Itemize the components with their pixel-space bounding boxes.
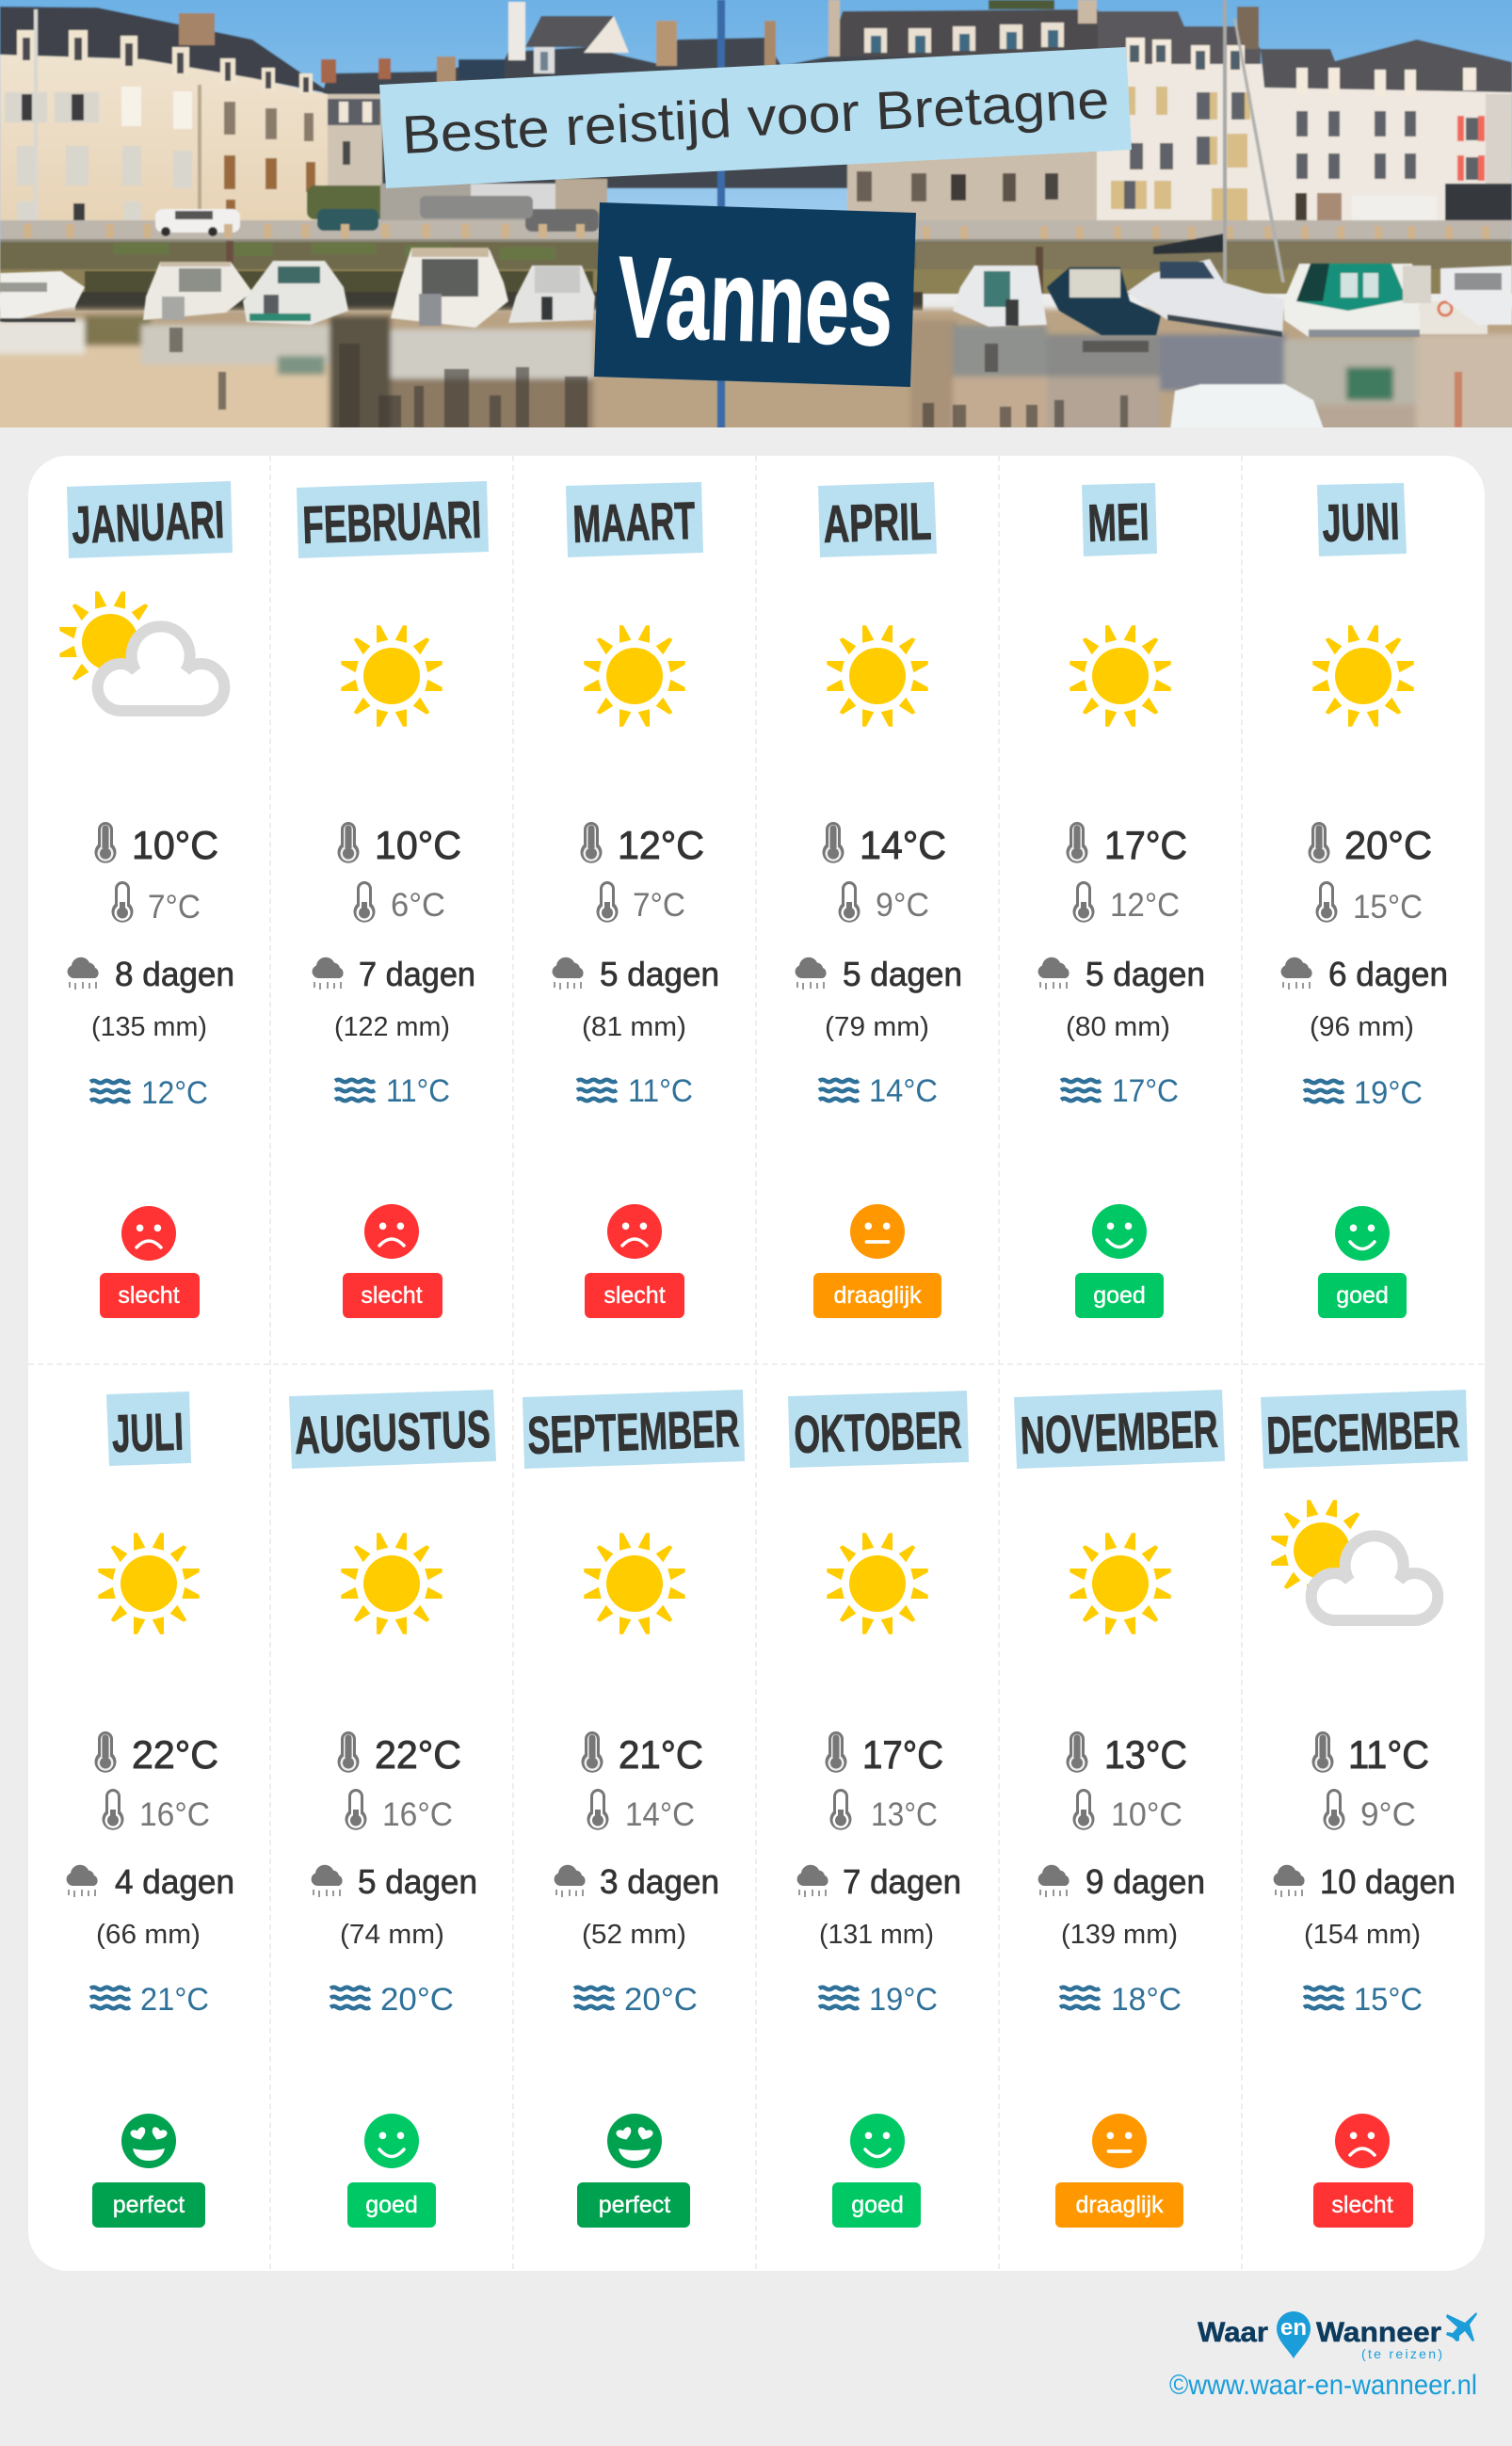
rainfall: (52 mm) xyxy=(582,1920,686,1950)
icon: map pin xyxy=(1277,2311,1311,2358)
rating draaglijk xyxy=(1055,2114,1183,2228)
rating goed: goed xyxy=(1336,1282,1389,1309)
min temperature xyxy=(345,1789,453,1833)
city name: Vannes xyxy=(616,233,894,370)
month label augustus xyxy=(289,1390,496,1469)
rain days: 8 dagen xyxy=(115,955,234,993)
sea temperature: 21°C xyxy=(140,1982,209,2018)
panel: november xyxy=(1014,1390,1225,2228)
rating goed: goed xyxy=(1093,1282,1146,1309)
max temperature xyxy=(1312,1731,1429,1777)
rainfall: (81 mm) xyxy=(582,1012,686,1042)
rainfall: (66 mm) xyxy=(96,1920,201,1950)
rainfall: (122 mm) xyxy=(334,1012,450,1042)
rain days: 6 dagen xyxy=(1328,955,1448,993)
title band xyxy=(379,47,1132,188)
max temperature: 10°C xyxy=(375,823,461,867)
rating slecht: slecht xyxy=(1331,2192,1393,2218)
rainfall: (139 mm) xyxy=(1061,1920,1178,1950)
min temperature: 16°C xyxy=(139,1796,210,1833)
max temperature: 17°C xyxy=(1104,823,1187,867)
icon: sun xyxy=(1070,1533,1171,1634)
logo: Waar en Wanneer: Waar xyxy=(1198,2317,1268,2348)
logo: Waar en Wanneer: (te reizen) xyxy=(1361,2346,1442,2361)
rating slecht xyxy=(585,1204,684,1318)
sea temperature xyxy=(1060,1982,1182,2018)
min temperature xyxy=(838,881,929,924)
rain days: 10 dagen xyxy=(1320,1862,1456,1901)
sea temperature xyxy=(330,1982,454,2018)
panel: september xyxy=(523,1390,745,2228)
rain days: 5 dagen xyxy=(358,1862,477,1901)
sea temperature: 12°C xyxy=(141,1075,208,1111)
month label november xyxy=(1014,1390,1225,1469)
rating slecht xyxy=(343,1204,442,1318)
sea temperature xyxy=(335,1073,450,1109)
min temperature xyxy=(1073,881,1180,924)
icon: sun xyxy=(341,1533,442,1634)
min temperature: 6°C xyxy=(391,887,445,924)
rating slecht: slecht xyxy=(361,1282,423,1309)
rain days: 4 dagen xyxy=(115,1862,234,1901)
month label maart xyxy=(566,482,703,557)
month label augustus: AUGUSTUS xyxy=(294,1399,491,1465)
rainfall: (74 mm) xyxy=(340,1920,444,1950)
month label juni: JUNI xyxy=(1321,491,1400,553)
min temperature: 14°C xyxy=(625,1796,695,1833)
logo: Waar en Wanneer xyxy=(1198,2311,1477,2361)
icon: sun behind cloud xyxy=(1271,1500,1438,1620)
sea temperature xyxy=(1061,1073,1179,1109)
rain days: 5 dagen xyxy=(843,955,962,993)
rating slecht: slecht xyxy=(603,1282,666,1309)
sea temperature: 14°C xyxy=(869,1073,938,1109)
sea temperature xyxy=(574,1982,698,2018)
rainfall: (80 mm) xyxy=(1066,1012,1170,1042)
min temperature: 16°C xyxy=(382,1796,453,1833)
rating perfect: perfect xyxy=(113,2192,185,2218)
rainfall: (135 mm) xyxy=(91,1012,207,1042)
rain days: 7 dagen xyxy=(843,1862,961,1901)
rain days xyxy=(313,955,475,993)
rating perfect xyxy=(92,2114,205,2228)
min temperature: 13°C xyxy=(871,1796,938,1833)
panel: mei xyxy=(1038,483,1205,1318)
min temperature: 10°C xyxy=(1111,1796,1182,1833)
rain days xyxy=(67,1862,234,1901)
sea temperature: 20°C xyxy=(624,1982,698,2018)
month label juni xyxy=(1317,483,1407,556)
max temperature: 13°C xyxy=(1104,1732,1187,1777)
rating draaglijk xyxy=(813,1204,941,1318)
rating slecht xyxy=(1313,2114,1413,2228)
max temperature xyxy=(825,1731,943,1777)
month label april: APRIL xyxy=(822,491,932,554)
sea temperature xyxy=(1304,1075,1423,1111)
rating goed xyxy=(832,2114,921,2228)
month label maart: MAART xyxy=(571,491,696,554)
sea temperature xyxy=(577,1073,693,1109)
min temperature xyxy=(1073,1789,1182,1833)
month label oktober xyxy=(788,1391,969,1468)
max temperature: 11°C xyxy=(1348,1732,1429,1777)
max temperature xyxy=(582,1731,703,1777)
rating slecht xyxy=(100,1206,200,1318)
icon: sun behind cloud xyxy=(59,591,224,711)
panel: december xyxy=(1261,1390,1468,2228)
rating goed xyxy=(1075,1204,1164,1318)
rating perfect xyxy=(577,2114,690,2228)
max temperature: 22°C xyxy=(132,1732,218,1777)
max temperature: 20°C xyxy=(1344,823,1432,867)
min temperature: 9°C xyxy=(1360,1796,1416,1833)
max temperature: 14°C xyxy=(860,823,946,867)
panel: oktober xyxy=(788,1391,969,2228)
min temperature xyxy=(1324,1789,1416,1833)
max temperature xyxy=(94,822,218,867)
rating perfect: perfect xyxy=(599,2192,670,2218)
rain days: 5 dagen xyxy=(1086,955,1205,993)
icon: sun xyxy=(98,1533,200,1634)
rating draaglijk: draaglijk xyxy=(833,1282,922,1309)
min temperature xyxy=(354,881,445,924)
min temperature: 12°C xyxy=(1110,887,1180,924)
sea temperature: 19°C xyxy=(869,1982,938,2018)
month label april xyxy=(818,482,937,557)
sea temperature xyxy=(90,1982,209,2018)
max temperature: 21°C xyxy=(619,1732,703,1777)
month label februari: FEBRUARI xyxy=(301,490,482,555)
panel: februari xyxy=(297,481,489,1318)
sea temperature: 20°C xyxy=(380,1982,454,2018)
month label september: SEPTEMBER xyxy=(526,1398,740,1465)
icon: sun xyxy=(827,625,928,727)
rain days: 3 dagen xyxy=(600,1862,719,1901)
header photo: harbour of Vannes xyxy=(0,0,1512,437)
sea temperature xyxy=(819,1073,938,1109)
icon: sun xyxy=(584,625,685,727)
rating goed xyxy=(347,2114,436,2228)
max temperature: 17°C xyxy=(862,1732,943,1777)
rainfall: (131 mm) xyxy=(819,1920,934,1950)
panel: calendar card xyxy=(28,456,1485,2271)
max temperature xyxy=(1066,822,1187,867)
sea temperature: 11°C xyxy=(386,1073,450,1109)
month label september xyxy=(523,1390,745,1469)
rainfall: (96 mm) xyxy=(1310,1012,1414,1042)
max temperature xyxy=(1309,822,1432,867)
panel: juli xyxy=(67,1392,234,2228)
icon: sun xyxy=(827,1533,928,1634)
max temperature xyxy=(94,1731,218,1777)
panel: maart xyxy=(553,482,719,1318)
sea temperature xyxy=(90,1075,208,1111)
sea temperature: 19°C xyxy=(1354,1075,1423,1111)
max temperature: 12°C xyxy=(618,823,704,867)
min temperature xyxy=(111,881,201,925)
website url: ©www.waar-en-wanneer.nl xyxy=(1169,2370,1477,2401)
rainfall: (154 mm) xyxy=(1304,1920,1421,1950)
icon: sun xyxy=(1070,625,1171,727)
month label januari: JANUARI xyxy=(71,490,225,555)
rating slecht: slecht xyxy=(118,1282,180,1309)
rating goed xyxy=(1318,1206,1407,1318)
min temperature xyxy=(102,1789,210,1833)
icon: sun xyxy=(1312,625,1414,727)
max temperature xyxy=(1066,1731,1187,1777)
city name block xyxy=(594,202,916,387)
rainfall: (79 mm) xyxy=(825,1012,929,1042)
min temperature: 15°C xyxy=(1353,889,1423,925)
max temperature xyxy=(337,822,461,867)
icon: sun xyxy=(584,1533,685,1634)
panel: april xyxy=(796,482,962,1318)
panel: juni xyxy=(1281,483,1448,1318)
min temperature xyxy=(830,1789,938,1833)
min temperature xyxy=(597,881,685,924)
sea temperature xyxy=(819,1982,938,2018)
sea temperature: 11°C xyxy=(628,1073,693,1109)
min temperature xyxy=(587,1789,695,1833)
month label oktober: OKTOBER xyxy=(793,1400,962,1464)
sea temperature: 18°C xyxy=(1111,1982,1182,2018)
icon: sun xyxy=(341,625,442,727)
month label mei xyxy=(1082,483,1157,556)
month label juli xyxy=(106,1392,191,1466)
sea temperature xyxy=(1304,1982,1423,2018)
icon: map pin: en xyxy=(1280,2315,1307,2341)
month label mei: MEI xyxy=(1086,491,1150,553)
panel: augustus xyxy=(289,1390,496,2228)
logo: Waar en Wanneer: Wanneer xyxy=(1316,2317,1441,2348)
max temperature: 10°C xyxy=(132,823,218,867)
rain days: 9 dagen xyxy=(1086,1862,1205,1901)
rain days: 7 dagen xyxy=(359,955,475,993)
month label november: NOVEMBER xyxy=(1020,1399,1219,1465)
min temperature: 9°C xyxy=(876,887,929,924)
max temperature xyxy=(337,1731,461,1777)
rating draaglijk: draaglijk xyxy=(1075,2192,1164,2218)
rain days: 5 dagen xyxy=(600,955,719,993)
max temperature: 22°C xyxy=(375,1732,461,1777)
rating goed: goed xyxy=(851,2192,904,2218)
month label januari xyxy=(67,481,233,558)
max temperature xyxy=(823,822,946,867)
min temperature: 7°C xyxy=(633,887,685,924)
icon: airplane xyxy=(1446,2312,1477,2341)
rating goed: goed xyxy=(365,2192,418,2218)
panel: januari xyxy=(59,481,234,1318)
month label juli: JULI xyxy=(111,1402,185,1463)
sea temperature: 17°C xyxy=(1112,1073,1179,1109)
title text: Beste reistijd voor Bretagne xyxy=(400,70,1111,166)
min temperature xyxy=(1316,881,1423,925)
max temperature xyxy=(580,822,704,867)
sea temperature: 15°C xyxy=(1354,1982,1423,2018)
min temperature: 7°C xyxy=(148,889,201,925)
month label februari xyxy=(297,481,489,558)
